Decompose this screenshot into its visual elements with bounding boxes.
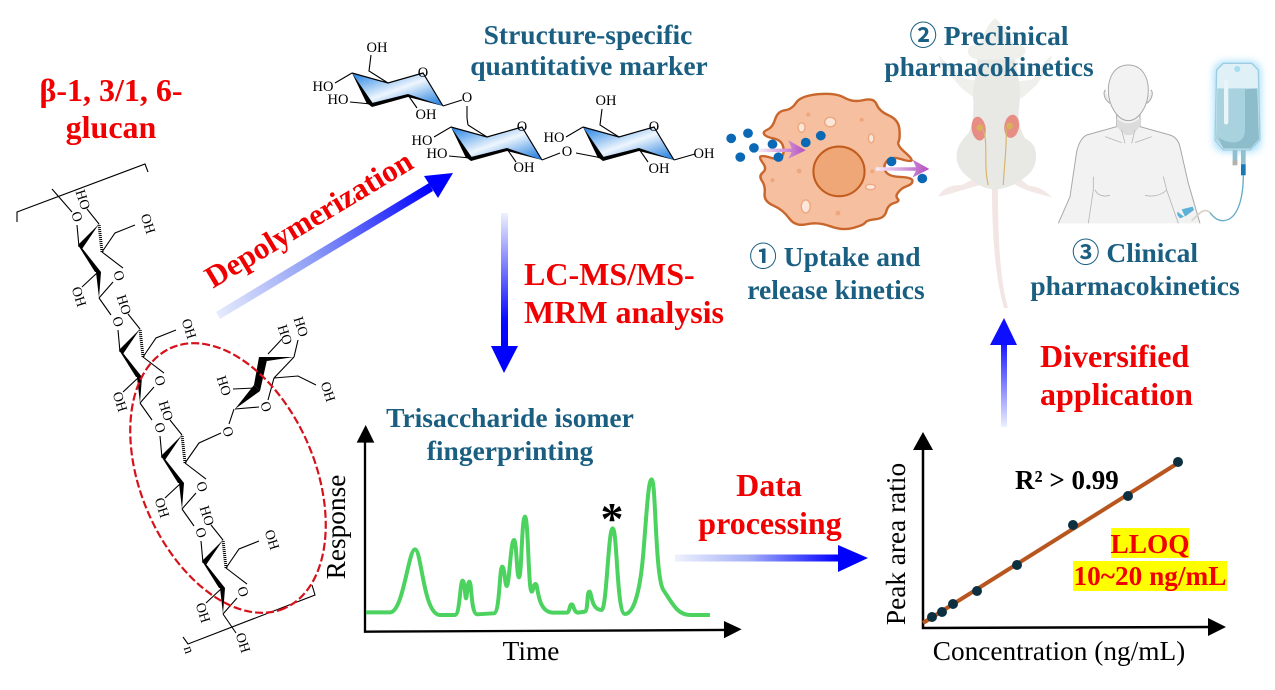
nanoparticles <box>726 129 927 183</box>
icon: macrophage cell <box>726 94 929 229</box>
label: LC-MS/MS-MRM analysis <box>524 256 724 330</box>
chromatogram trace <box>366 479 710 615</box>
sugar ring 2: HO <box>113 293 133 317</box>
sugar ring 2: OH <box>109 390 129 414</box>
middle glucose ring <box>412 119 572 176</box>
sugar ring 1: OH <box>68 285 88 309</box>
right glucose ring: OH <box>596 93 617 109</box>
heading: uptake and release kinetics <box>747 241 925 305</box>
heading: clinical pharmacokinetics: pharmacokinetics <box>1030 270 1240 301</box>
icon: mouse with kidneys <box>938 18 1052 308</box>
sugar ring 1 <box>67 188 157 315</box>
sugar ring 4: OH <box>192 601 212 625</box>
heading: uptake and release kinetics: ① Uptake and <box>749 241 921 272</box>
heading: structure-specific marker <box>470 19 708 81</box>
top glucose ring: HO <box>328 92 348 108</box>
branch sugar ring <box>213 315 337 424</box>
middle glucose ring: O <box>517 119 527 135</box>
trisaccharide structure <box>313 40 715 177</box>
LLOQ callout: LLOQ <box>1111 529 1189 559</box>
top glucose ring: O <box>462 90 472 106</box>
heading: trisaccharide isomer fingerprinting: Trisaccharide isomer <box>386 402 634 433</box>
icon: IV drip bag <box>1177 62 1261 221</box>
data points <box>927 457 1183 622</box>
heading: preclinical pharmacokinetics: pharmacokinetics <box>884 51 1094 82</box>
middle glucose ring: HO <box>412 133 432 149</box>
release arrow <box>876 159 929 178</box>
asterisk marker: * <box>600 493 624 544</box>
sugar ring 3: O <box>218 425 236 439</box>
middle glucose ring: OH <box>514 160 535 176</box>
x axis label: Concentration (ng/mL) <box>933 636 1185 666</box>
mouse tail <box>992 188 1008 308</box>
top glucose ring: OH <box>416 107 437 123</box>
sugar ring 2: O <box>150 374 168 388</box>
title: beta-glucan: glucan <box>66 109 157 145</box>
sugar ring 3: O <box>150 421 168 435</box>
heading: uptake and release kinetics: release kinetics <box>747 274 925 305</box>
sugar ring 1: HO <box>72 188 92 212</box>
branch sugar ring: O <box>256 400 274 414</box>
sugar ring 4 <box>191 504 281 655</box>
sugar ring 1: O <box>109 269 127 283</box>
right glucose ring <box>544 93 715 177</box>
sugar ring 2: O <box>108 315 126 329</box>
icon: human patient <box>1058 65 1200 223</box>
chart: chromatogram <box>321 425 742 666</box>
heading: preclinical pharmacokinetics: ② Preclinical <box>909 20 1069 51</box>
sugar ring 2: OH <box>178 317 198 341</box>
sugar ring 3: O <box>192 480 210 494</box>
arrow: data processing <box>675 545 868 572</box>
heading: clinical pharmacokinetics <box>1030 237 1240 301</box>
top glucose ring <box>313 40 472 125</box>
mouse body <box>938 18 1052 197</box>
label: LC-MS/MS-MRM analysis: LC-MS/MS- <box>524 256 695 292</box>
r-squared annotation: R² > 0.99 <box>1015 465 1119 495</box>
LLOQ callout: 10~20 ng/mL <box>1074 561 1226 591</box>
top glucose ring: OH <box>367 40 388 56</box>
branch sugar ring: HO <box>213 374 233 398</box>
heading: trisaccharide isomer fingerprinting: fingerprinting <box>427 435 594 466</box>
top glucose ring: O <box>418 65 428 81</box>
label: LC-MS/MS-MRM analysis: MRM analysis <box>524 294 724 330</box>
arrow: LC-MS down <box>491 213 518 373</box>
arrow: diversified application <box>990 318 1017 427</box>
polymer structure: beta-glucan chain: n <box>180 644 196 656</box>
red dashed ellipse: repeating unit <box>92 313 364 643</box>
right glucose ring: OH <box>649 161 670 177</box>
heading: clinical pharmacokinetics: ③ Clinical <box>1072 237 1198 268</box>
sugar ring 1: OH <box>137 212 157 236</box>
sugar ring 4: O <box>191 526 209 540</box>
arrow: depolymerization <box>216 173 453 319</box>
right glucose ring: HO <box>544 130 564 146</box>
chart: calibration curve <box>881 432 1227 666</box>
sugar ring 4: OH <box>261 528 281 552</box>
label: diversified application: application <box>1040 376 1193 412</box>
top glucose ring: HO <box>313 79 333 95</box>
label: diversified application: Diversified <box>1040 338 1190 374</box>
heading: preclinical pharmacokinetics <box>884 20 1094 82</box>
heading: structure-specific marker: quantitative marker <box>470 50 708 81</box>
sugar ring 3: OH <box>151 496 171 520</box>
axes <box>357 425 742 638</box>
label: data processing <box>698 467 842 541</box>
LLOQ callout <box>1073 528 1227 591</box>
branch sugar ring: OH <box>317 380 337 404</box>
right glucose ring: OH <box>694 146 715 162</box>
heading: trisaccharide isomer fingerprinting <box>386 402 634 466</box>
branch sugar ring: HO <box>274 323 294 347</box>
branch sugar ring: HO <box>290 315 310 339</box>
axes <box>923 448 1210 628</box>
uptake arrow <box>758 140 806 159</box>
sugar ring 3 <box>150 399 236 526</box>
label: data processing: processing <box>698 505 842 541</box>
polymer structure: beta-glucan chain <box>17 164 337 656</box>
middle glucose ring: HO <box>427 146 447 162</box>
sugar ring 4: OH <box>232 631 252 655</box>
label: depolymerization: Depolymerization <box>198 143 419 295</box>
middle glucose ring: O <box>562 144 572 160</box>
y axis label: Response <box>321 475 351 579</box>
label: data processing: Data <box>736 467 802 503</box>
sugar ring 2 <box>108 293 198 420</box>
x axis label: Time <box>503 636 559 666</box>
title: beta-glucan: β-1, 3/1, 6- <box>39 72 183 108</box>
sugar ring 4: HO <box>196 504 216 528</box>
sugar ring 3: HO <box>155 399 175 423</box>
label: diversified application <box>1040 338 1193 412</box>
y axis label: Peak area ratio <box>881 463 911 625</box>
title: beta-glucan <box>39 72 183 145</box>
sugar ring 4: O <box>233 585 251 599</box>
right glucose ring: O <box>649 119 659 135</box>
heading: structure-specific marker: Structure-specific <box>484 19 692 50</box>
regression line <box>923 463 1178 623</box>
sugar ring 1: O <box>67 210 85 224</box>
